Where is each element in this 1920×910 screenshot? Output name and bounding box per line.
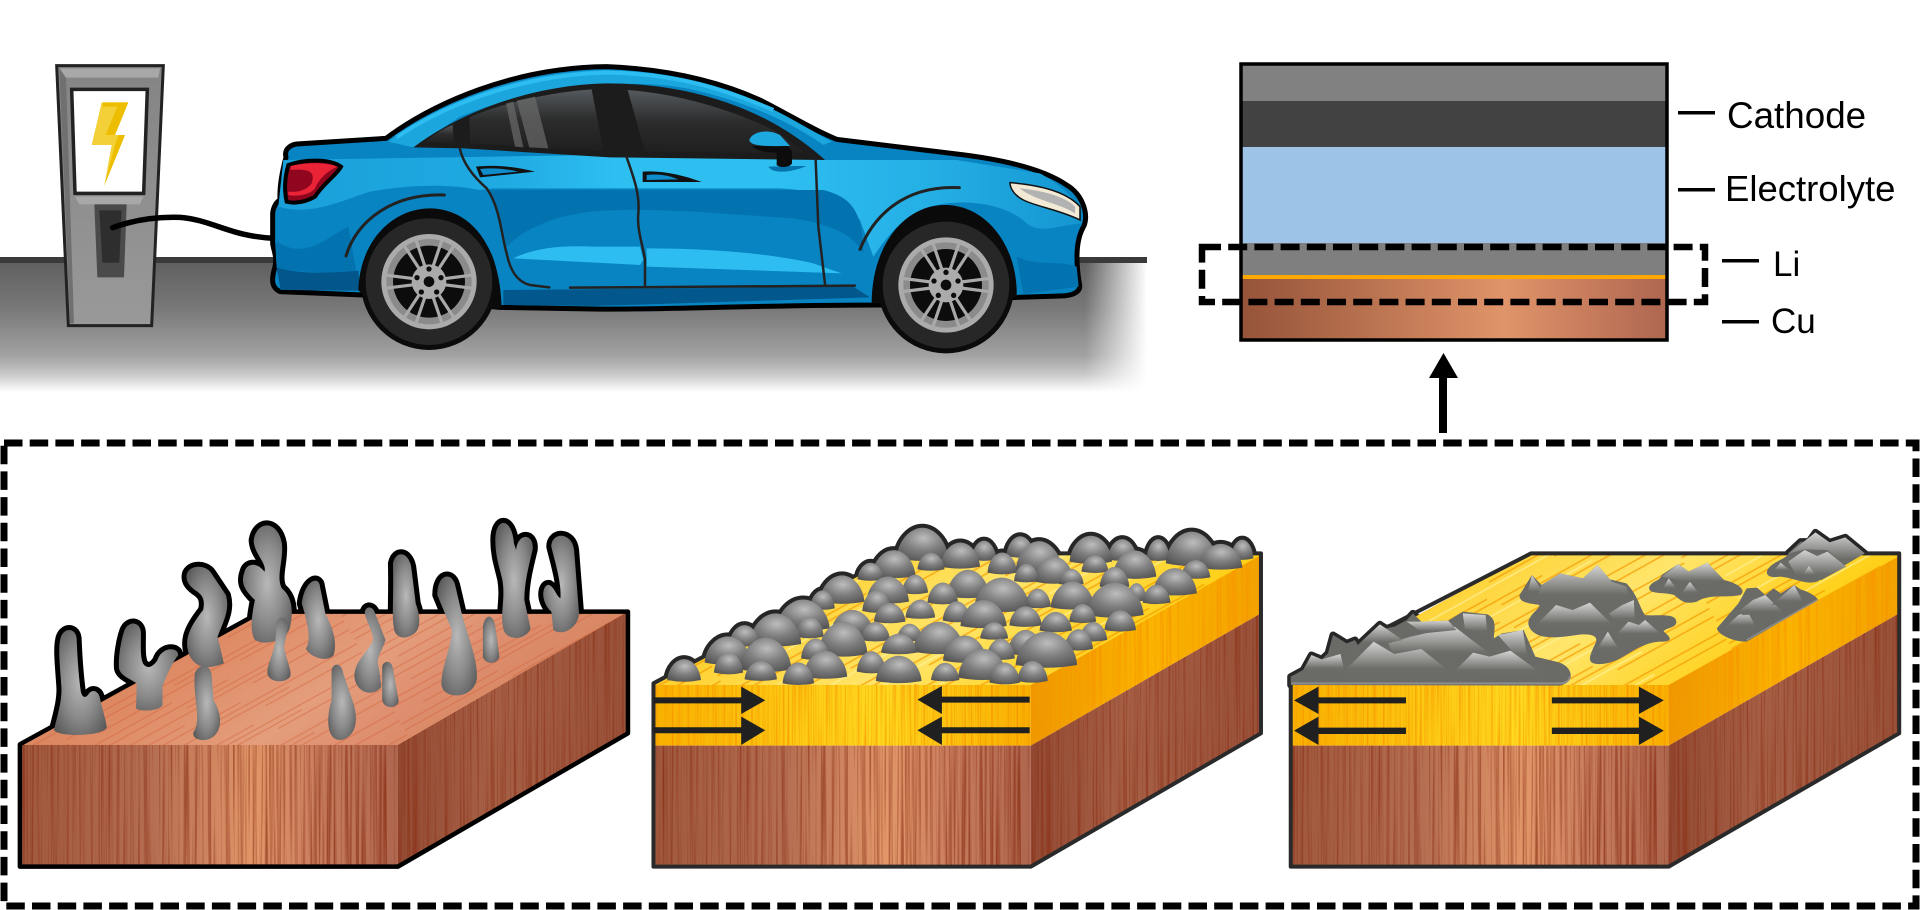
- yellow side layer: [1031, 555, 1261, 746]
- car front wheel: [878, 217, 1014, 353]
- copper top face: [20, 612, 628, 750]
- car side mirror: [749, 131, 807, 172]
- label: Electrolyte: Electrolyte: [1725, 168, 1895, 209]
- copper front face: [20, 745, 398, 867]
- lithium islands: [1291, 532, 1865, 686]
- car wheel arches: [358, 205, 1017, 308]
- arrow: zoom link up to battery: [1429, 353, 1458, 433]
- lithium dendrites: [54, 523, 579, 740]
- label: Cu: [1722, 302, 1816, 341]
- layer: copper: [1241, 279, 1667, 339]
- yellow side layer: [1669, 556, 1899, 746]
- label: Cathode: Cathode: [1727, 95, 1866, 136]
- car: [273, 67, 1086, 353]
- car windows: [413, 83, 825, 160]
- road and background ground: [0, 257, 1147, 392]
- layer: cathode: [1241, 101, 1667, 147]
- arrows: outward stress: [1294, 687, 1664, 745]
- layer: electrolyte: [1241, 147, 1667, 243]
- layer: lithium metal: [1241, 243, 1667, 275]
- yellow top face: [1291, 553, 1899, 690]
- copper side face: [1669, 613, 1899, 867]
- panel: battery cross-section stack: [1241, 64, 1667, 340]
- panel: planar lithium islands on interlayer with tensile stress: [1291, 532, 1899, 867]
- copper front face: [1291, 746, 1669, 867]
- panel: dendritic lithium on bare copper: [20, 523, 628, 867]
- car body lines and door seams: [346, 149, 959, 288]
- yellow front layer: [1291, 685, 1669, 746]
- car door handles: [476, 166, 702, 182]
- layer: cathode current collector: [1241, 65, 1667, 101]
- label: Li: [1722, 245, 1800, 284]
- label: Li: Li: [1773, 245, 1800, 284]
- car rear wheel: [361, 213, 497, 350]
- copper side face: [1031, 613, 1261, 867]
- copper front face: [653, 746, 1031, 867]
- copper side face: [398, 612, 628, 867]
- car body: [273, 67, 1086, 309]
- charging cable: [113, 217, 275, 238]
- yellow front layer: [653, 685, 1031, 746]
- arrows: inward stress: [653, 686, 1030, 745]
- yellow top face: [654, 553, 1261, 690]
- icon: lightning bolt: [92, 102, 128, 186]
- label: Cu: Cu: [1771, 302, 1816, 341]
- dashed callout around Li and Cu interface: [1202, 247, 1705, 302]
- panel: granular lithium on interlayer with compressive stress: [653, 528, 1261, 867]
- car headlight: [1010, 183, 1080, 220]
- car body highlights: [275, 70, 1081, 306]
- icon: charging station: [57, 66, 163, 326]
- car tail light: [285, 161, 341, 203]
- layer: interlayer: [1241, 275, 1667, 279]
- dashed panel: three deposition morphologies: [4, 443, 1916, 906]
- lithium domes: [667, 528, 1253, 685]
